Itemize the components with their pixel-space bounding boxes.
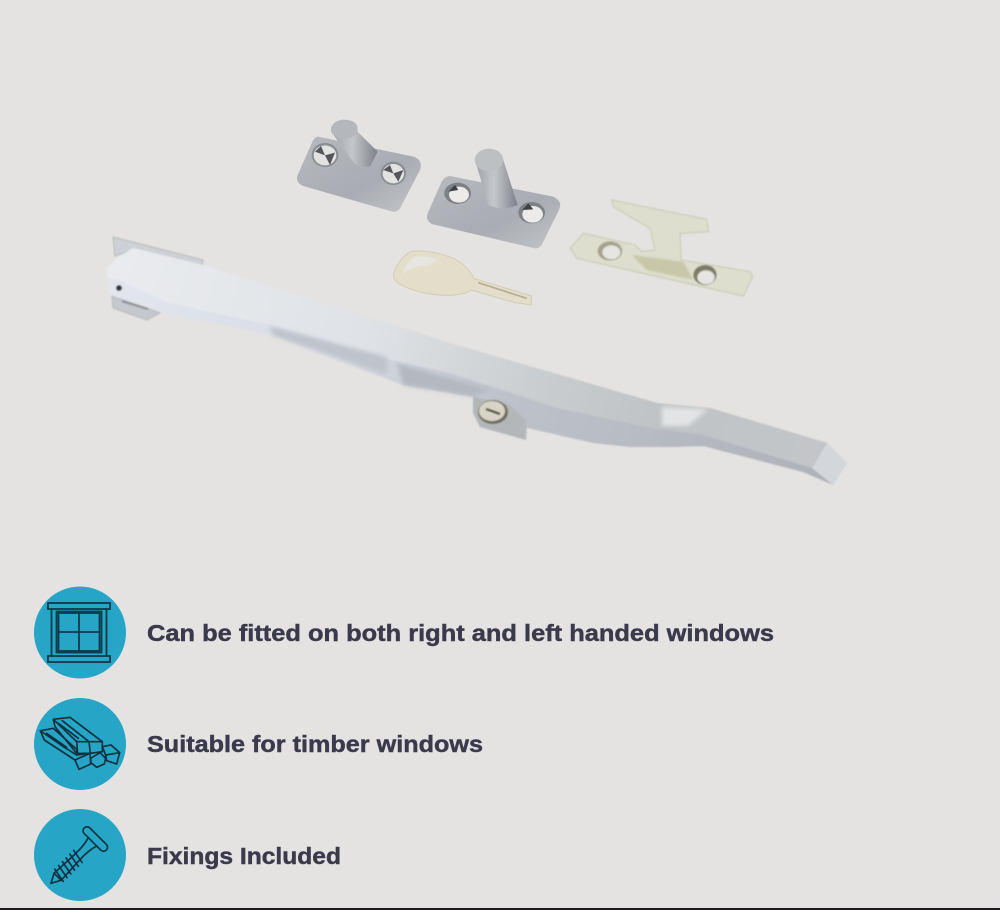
bottom lug [112,296,160,320]
right block [102,745,120,764]
tip facet [812,443,847,485]
grey recess patches [270,326,387,375]
small front block [91,753,106,767]
feature 3 text: Fixings Included [147,843,341,869]
lock cylinder [478,400,508,424]
window stay bar [107,237,847,485]
upper beam outline [53,717,102,753]
feature 1 text: Can be fitted on both right and left handed windows [147,620,774,646]
bar upper face [107,248,827,468]
feature 1: window icon [34,586,126,678]
bar lower face [107,248,847,485]
feature 2 text: Suitable for timber windows [147,731,483,757]
key [393,251,532,305]
bracket: left keep [297,120,421,212]
bottom rule [0,908,1000,910]
lower beam outline [40,728,91,769]
bend highlight [662,407,708,426]
top lug plate [113,237,203,267]
feature 2: timber icon [34,698,126,790]
striker catch plate [570,200,753,296]
feature 3: screw icon [34,809,126,901]
key slot [486,409,500,414]
lock plate [473,397,526,440]
pivot hole [116,285,122,291]
bracket: right keep [427,149,560,248]
lug slot [122,301,148,309]
